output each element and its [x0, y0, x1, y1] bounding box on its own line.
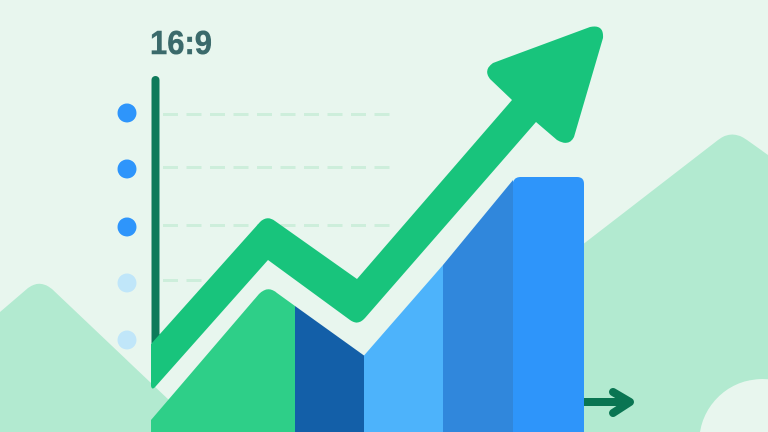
- small arrow: [584, 392, 630, 413]
- vertical axis: [152, 80, 160, 350]
- dashed guide lines: [163, 114, 392, 280]
- background mountain right: [560, 134, 768, 432]
- legend dots: [118, 104, 136, 350]
- main growth arrow: [151, 26, 603, 389]
- background mountain left: [0, 284, 190, 432]
- bar: green: [151, 289, 295, 432]
- bar: light blue: [364, 265, 443, 432]
- bar: bright blue: [513, 177, 584, 432]
- bar: dark blue: [295, 306, 364, 432]
- bar: medium blue: [443, 180, 513, 432]
- background circle: [700, 379, 768, 432]
- title: 16:9: [150, 24, 212, 61]
